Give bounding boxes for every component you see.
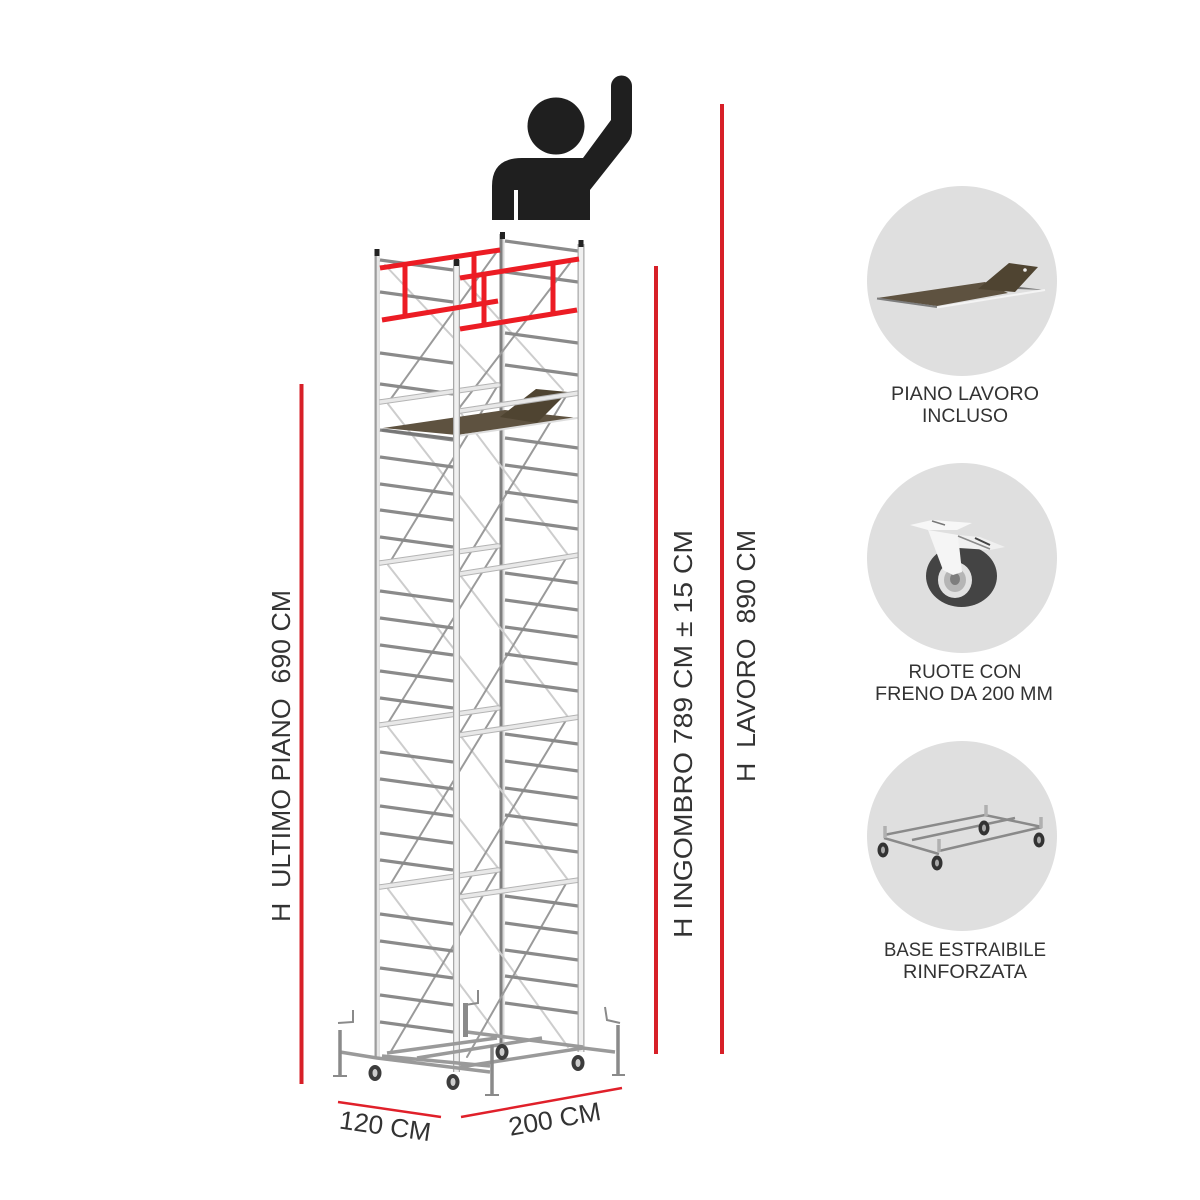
feature: castor wheel bbox=[867, 463, 1057, 705]
feature: work platform: INCLUSO bbox=[922, 406, 1008, 427]
outriggers and cranks bbox=[333, 990, 625, 1095]
label: PIANO LAVORO bbox=[891, 384, 1039, 405]
castor wheels bbox=[368, 1044, 584, 1090]
horizontal braces bbox=[380, 385, 579, 897]
work platform deck bbox=[383, 389, 578, 439]
icon: wheel bbox=[910, 520, 1005, 607]
dimension: depth line bbox=[338, 1102, 441, 1117]
icon: platform bbox=[877, 263, 1045, 308]
feature: castor wheel: FRENO DA 200 MM bbox=[875, 684, 1053, 705]
label: H ingombro: H INGOMBRO 789 CM ± 15 CM bbox=[670, 530, 698, 938]
label: H lavoro: H LAVORO 890 CM bbox=[733, 530, 761, 782]
label: 120 CM: 120 CM bbox=[338, 1105, 433, 1147]
base frame bbox=[340, 1032, 615, 1072]
post caps bbox=[377, 232, 581, 266]
feature: work platform bbox=[867, 186, 1057, 427]
dark diagonal braces bbox=[388, 250, 570, 1057]
feature: reinforced base: RINFORZATA bbox=[903, 962, 1027, 983]
front and side posts bbox=[377, 244, 581, 1072]
rear posts bbox=[502, 234, 504, 1050]
label: BASE ESTRAIBILE bbox=[884, 940, 1046, 961]
icon: person with raised arm bbox=[492, 76, 632, 220]
dimension: width line bbox=[461, 1088, 622, 1117]
dimension: H ultimo piano line bbox=[300, 384, 304, 1084]
scaffold tower bbox=[333, 232, 625, 1095]
circle background bbox=[867, 186, 1057, 376]
dimension: H lavoro line bbox=[720, 104, 724, 1054]
circle background bbox=[867, 741, 1057, 931]
label: 200 CM: 200 CM bbox=[506, 1096, 603, 1142]
feature: reinforced base bbox=[867, 741, 1057, 983]
dimension: H ingombro line bbox=[654, 266, 658, 1054]
label: RUOTE CON bbox=[908, 662, 1022, 683]
light diagonal braces bbox=[385, 265, 568, 1047]
red guard rails bbox=[380, 250, 579, 329]
icon: base frame bbox=[878, 805, 1044, 870]
circle background bbox=[867, 463, 1057, 653]
ladder rungs bbox=[380, 241, 578, 1032]
label: H ultimo piano: H ULTIMO PIANO 690 CM bbox=[268, 590, 296, 922]
